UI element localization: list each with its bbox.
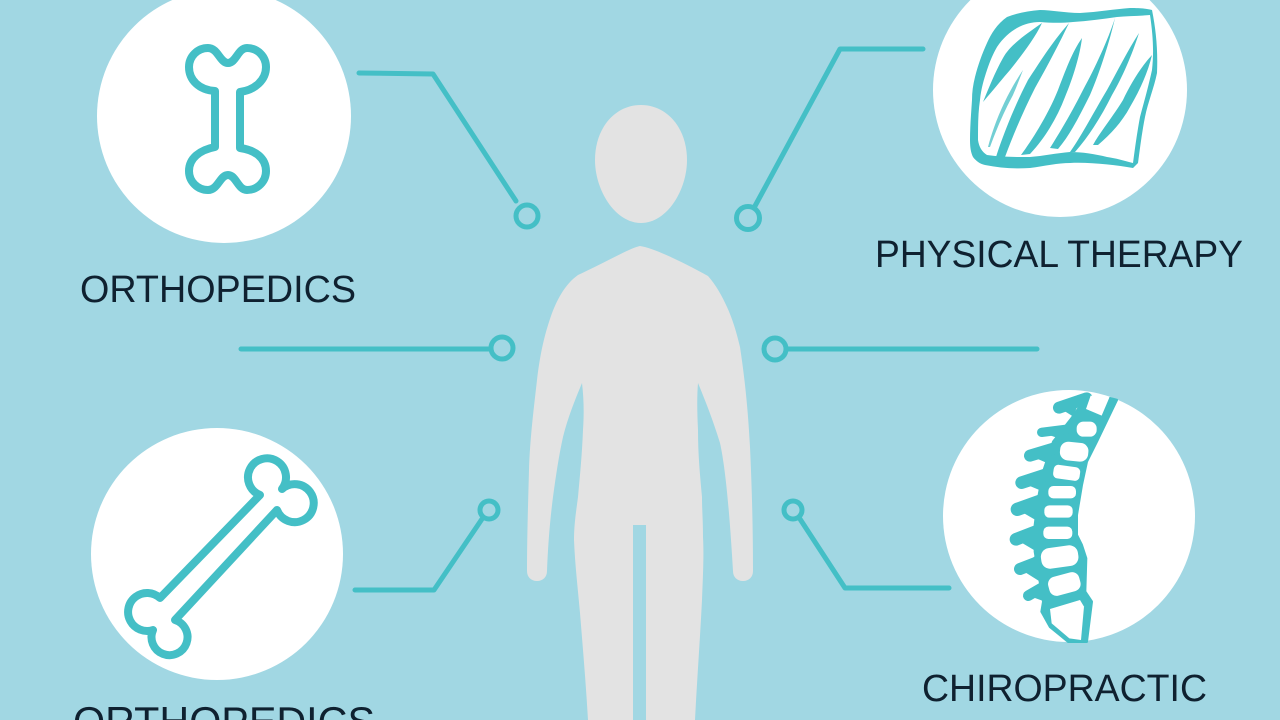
icon: spine <box>1016 394 1117 642</box>
process wedges <box>1016 394 1082 602</box>
label: ORTHOPEDICS <box>80 269 356 311</box>
muscle outline <box>970 8 1157 168</box>
muscle stripes <box>983 23 1042 102</box>
icon: vertical bone <box>189 48 266 190</box>
white circle <box>91 428 343 680</box>
connector: middle right <box>764 338 1037 360</box>
spine column <box>1035 394 1117 642</box>
connector: top left <box>359 73 538 227</box>
spinous processes <box>1016 398 1087 596</box>
connector: bottom right <box>784 501 949 588</box>
white circle <box>943 390 1195 642</box>
panel: chiropractic bottom right <box>922 390 1207 710</box>
vertebra gaps <box>1040 396 1109 640</box>
panel: physical therapy top right <box>875 0 1243 276</box>
panel: orthopedics bottom left <box>73 428 375 720</box>
human figure silhouette <box>527 105 753 720</box>
icon: muscle fibres <box>970 8 1157 168</box>
body <box>527 246 753 720</box>
label: PHYSICAL THERAPY <box>875 234 1243 276</box>
label: CHIROPRACTIC <box>922 668 1207 710</box>
connector: middle left <box>241 337 513 359</box>
connector: bottom left <box>355 501 498 590</box>
panel: orthopedics top left <box>80 0 356 311</box>
white circle <box>97 0 351 243</box>
head <box>595 105 687 223</box>
connector: top right <box>736 49 923 230</box>
white circle <box>933 0 1187 217</box>
icon: diagonal bone <box>128 458 314 655</box>
